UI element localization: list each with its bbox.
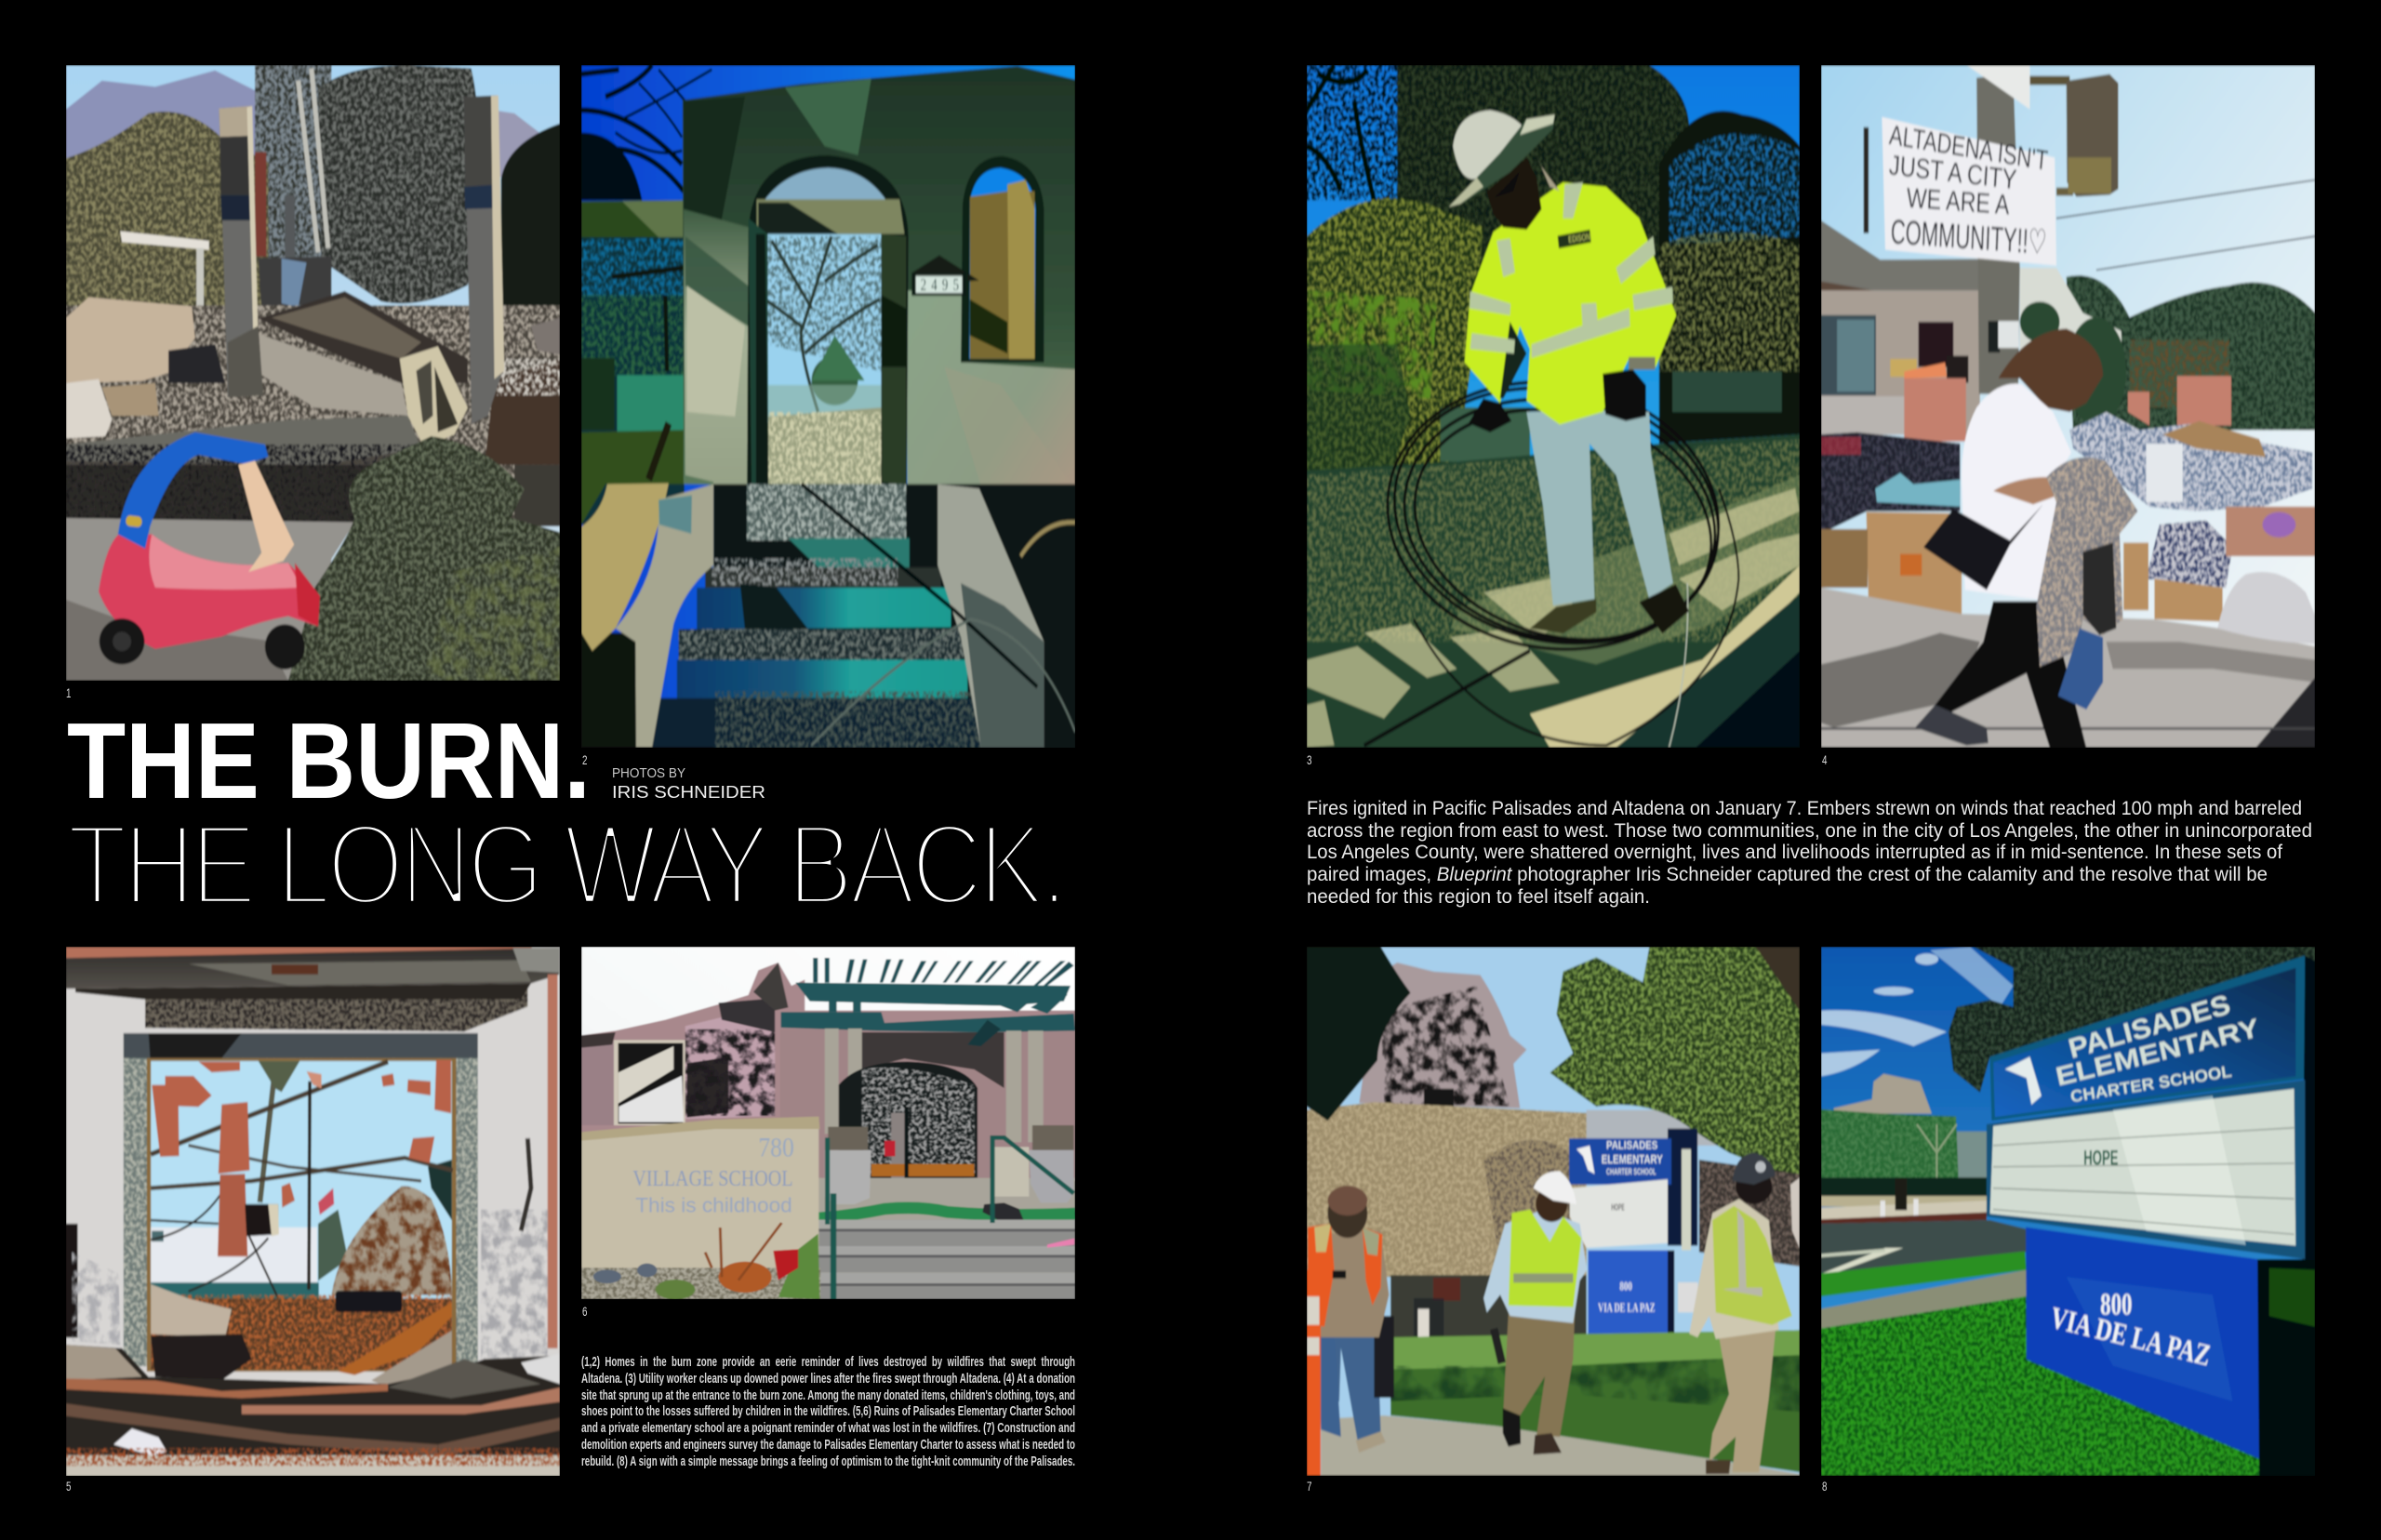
planters	[825, 1125, 1074, 1204]
hanging pipes	[151, 1062, 453, 1298]
cable coil	[1364, 367, 1738, 748]
school sign wall: 780	[758, 1131, 794, 1162]
address panel	[2026, 1228, 2269, 1468]
burned rubble mound	[151, 1186, 452, 1387]
photo number 5: 5	[66, 1479, 71, 1494]
photo 4: donation site with Altadena sign	[1821, 65, 2315, 748]
photo credit	[605, 758, 781, 804]
school sign wall	[581, 1117, 819, 1271]
intro paragraph	[1302, 795, 2321, 916]
trees	[2020, 268, 2315, 430]
sidewalk	[1821, 588, 2315, 748]
handwritten sign	[1882, 117, 2056, 266]
ornamental gate	[839, 1062, 978, 1184]
metal roof	[259, 291, 468, 383]
handwritten sign: JUST A CITY	[1888, 149, 2018, 195]
photo 3: utility worker with coiled cable	[1307, 65, 1800, 748]
magnolia tree	[1550, 947, 1800, 1267]
planting bed	[581, 1223, 820, 1299]
tiled door frame	[124, 1033, 478, 1372]
photo 5: burned tile doorway frame	[66, 947, 560, 1476]
photo number 4: 4	[1822, 752, 1827, 767]
utility pole	[1976, 74, 2020, 394]
main wall	[683, 66, 1075, 567]
school sign wall: VILLAGE SCHOOL	[632, 1165, 792, 1191]
photo number 1: 1	[66, 685, 71, 700]
green wall	[1821, 1109, 1959, 1185]
left pier	[684, 209, 749, 567]
handwritten sign: WE ARE A	[1906, 181, 2011, 220]
worker jacket: EDISON	[1568, 231, 1590, 245]
brick pillars	[1904, 376, 2231, 442]
photo 1: burned house with toy car	[66, 65, 560, 681]
photo credit: PHOTOS BY	[612, 765, 685, 781]
right arched window	[961, 156, 1044, 363]
woman walking	[1915, 328, 2138, 748]
worker head and hat	[1449, 110, 1560, 230]
ground	[1307, 434, 1800, 748]
address panel: VIA DE LA PAZ	[2048, 1300, 2214, 1373]
stone wall	[1307, 1102, 1587, 1277]
photo number 7: 7	[1307, 1479, 1311, 1494]
intro paragraph: needed for this region to feel itself again.	[1307, 886, 1650, 908]
worker pants	[1526, 410, 1673, 605]
photo number 3: 3	[1307, 752, 1311, 767]
right wall	[906, 290, 1075, 567]
school sign: PALISADES	[1606, 1138, 1657, 1152]
intro paragraph: paired images, Blueprint photographer Iris Schneider captured the crest of the calamity and the resolve that will be	[1307, 864, 2268, 885]
sooty soffit	[66, 948, 559, 1031]
sign header panel: PALISADES	[2066, 989, 2233, 1065]
handwritten sign: ALTADENA ISN'T	[1888, 119, 2049, 177]
gloves	[1469, 357, 1656, 432]
burned building	[581, 962, 1075, 1181]
shrubs	[288, 436, 560, 681]
house	[1821, 220, 1980, 434]
marquee board: HOPE	[2083, 1147, 2118, 1170]
grass	[1821, 1252, 2315, 1476]
fallen cables	[802, 485, 1075, 746]
steps	[817, 1220, 1075, 1299]
road	[1821, 1220, 2027, 1273]
worker boots	[1530, 584, 1689, 633]
pavement	[66, 518, 354, 681]
photo number 8: 8	[1822, 1479, 1827, 1494]
photo 2: burned archway with teal steps	[581, 65, 1075, 748]
house number plaque: 2495	[921, 276, 959, 295]
traffic signal	[2029, 74, 2118, 196]
ruined building	[1834, 1074, 1932, 1113]
stairs	[648, 485, 1075, 750]
roof tile edge	[66, 947, 532, 958]
pergola beams	[781, 983, 1075, 1046]
cardboard boxes	[1821, 512, 2223, 621]
traffic cone	[1307, 1270, 1321, 1476]
sky through opening	[151, 1061, 452, 1367]
photo number 2: 2	[582, 752, 587, 767]
air conditioner	[400, 346, 468, 447]
left stair wall	[581, 484, 713, 748]
worker jacket	[1465, 182, 1676, 425]
left tree	[1307, 947, 1411, 1121]
photo number 6: 6	[582, 1304, 587, 1319]
tree canopy	[1949, 947, 2315, 1093]
awning frame	[120, 231, 209, 310]
far sidewalk and fence	[1821, 1177, 1988, 1224]
distant building	[1957, 1132, 1987, 1188]
sign header panel: ELEMENTARY	[2053, 1013, 2262, 1092]
pergola slats	[813, 958, 1074, 986]
burned building	[1359, 962, 1526, 1109]
pillars	[219, 96, 504, 424]
address panel: 800	[2100, 1288, 2132, 1322]
photo 6: Village School entrance	[581, 947, 1075, 1299]
right wall stain and tile strip	[481, 975, 557, 1359]
school sign: CHARTER SCHOOL	[1606, 1167, 1656, 1176]
title	[56, 707, 1079, 916]
caption text	[577, 1350, 1079, 1471]
school sign: ELEMENTARY	[1602, 1153, 1663, 1166]
bag of donations	[2217, 572, 2315, 644]
school sign: HOPE	[1611, 1202, 1625, 1213]
worker right	[1689, 1152, 1800, 1474]
house number plaque	[911, 255, 979, 296]
school sign	[1569, 1129, 1698, 1335]
intro paragraph: Los Angeles County, were shattered overnight, lives and livelihoods interrupted as if in mid-sentence. In these sets of	[1307, 842, 2282, 863]
left background	[581, 200, 685, 524]
right stair wall	[938, 485, 1075, 748]
intro paragraph: across the region from east to west. Those two communities, one in the city of Los Angeles, the other in unincorporated	[1307, 820, 2312, 842]
street sign	[1967, 65, 2029, 109]
worker center	[1483, 1171, 1587, 1454]
school sign wall: This is childhood	[635, 1193, 792, 1216]
photo 7: engineers at Palisades Elementary	[1307, 947, 1800, 1476]
rubble pile	[66, 298, 560, 526]
handwritten sign: COMMUNITY!!♡	[1890, 212, 2047, 261]
worker left with orange vest	[1308, 1186, 1394, 1453]
photo 8: Palisades Elementary sign reading HOPE	[1821, 947, 2315, 1476]
palm and background buildings	[151, 1061, 452, 1300]
floor and hose	[818, 1178, 1075, 1225]
school sign: VIA DE LA PAZ	[1598, 1300, 1656, 1315]
footpath	[1321, 1415, 1800, 1476]
marquee board	[1987, 1080, 2305, 1259]
toy car	[99, 432, 320, 670]
school sign: 800	[1619, 1279, 1632, 1294]
sign header panel	[1990, 956, 2315, 1259]
sign header panel: CHARTER SCHOOL	[2069, 1062, 2233, 1106]
hanging terracotta pieces	[152, 1060, 451, 1256]
photo credit: IRIS SCHNEIDER	[612, 783, 765, 802]
columns	[825, 1029, 1044, 1142]
trees	[1307, 65, 1800, 477]
collapsed roof debris	[66, 1345, 560, 1477]
arch opening	[747, 155, 909, 565]
railings	[828, 1137, 1074, 1299]
clothing piles	[1821, 412, 2315, 588]
lawn	[1390, 1330, 1800, 1472]
